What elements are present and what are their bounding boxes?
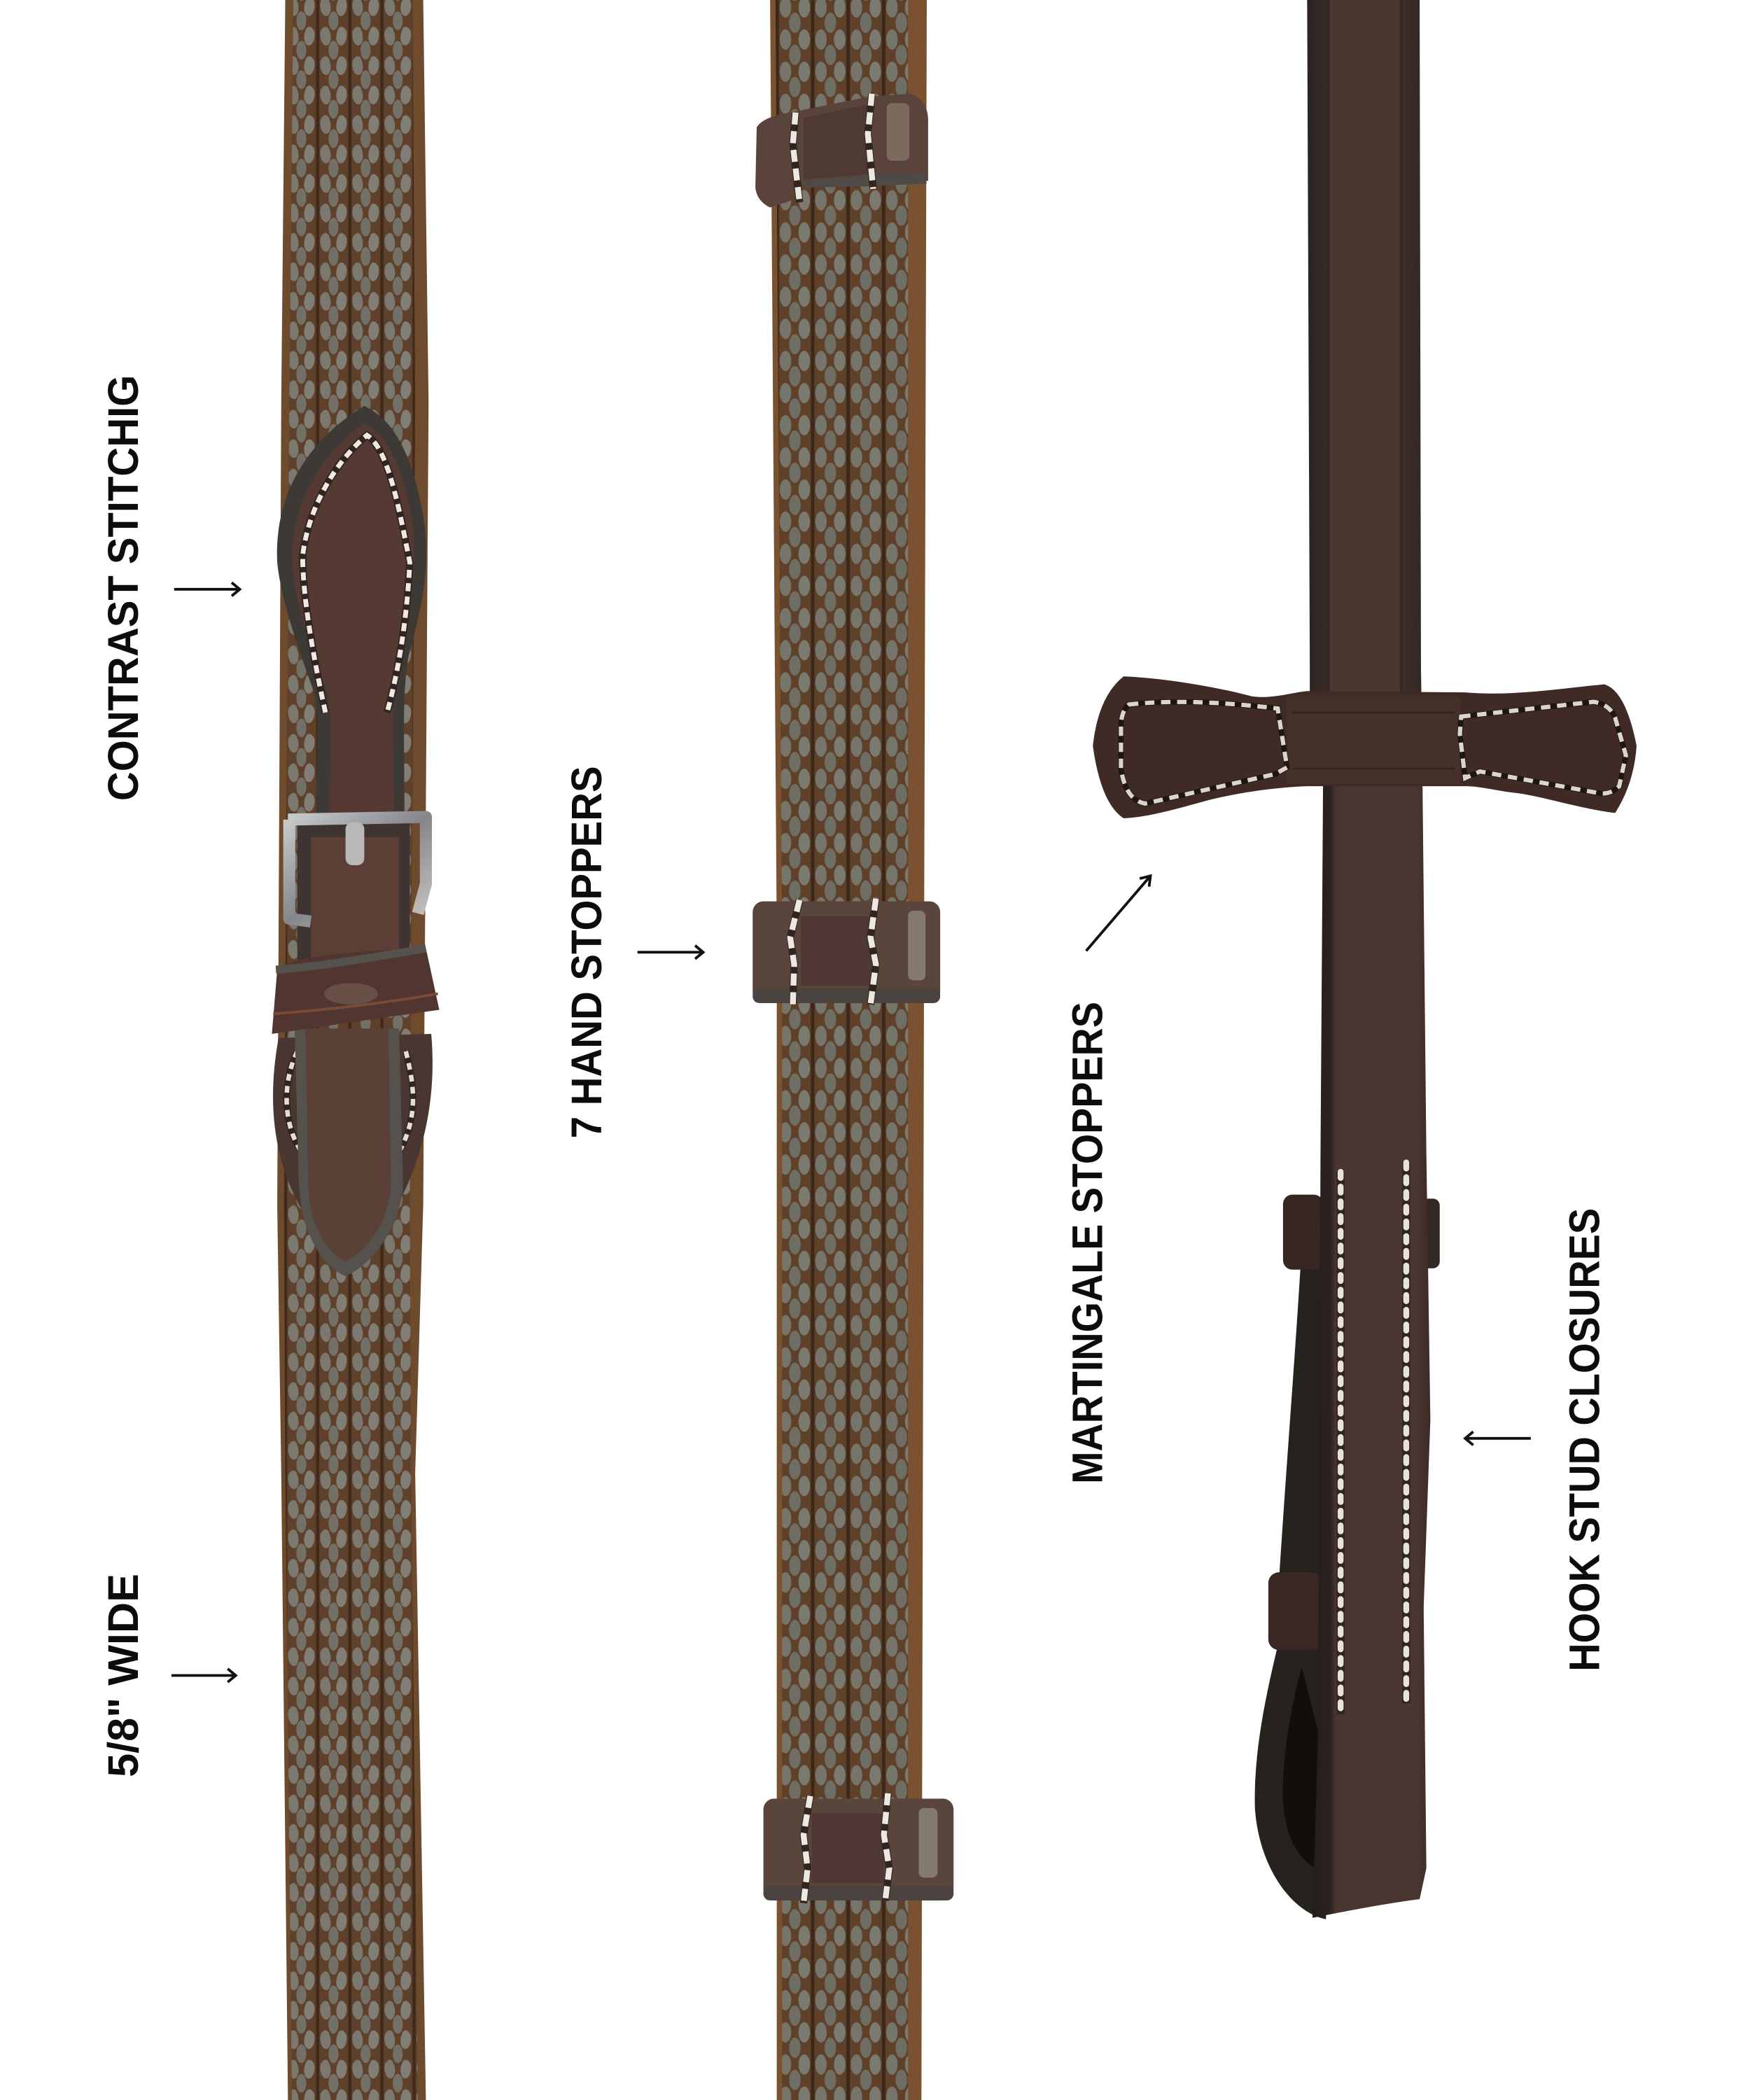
label: hand stoppers: 7 HAND STOPPERS [563, 766, 610, 1138]
hand stopper top [755, 94, 928, 208]
arrow: martingale stoppers [1086, 876, 1150, 951]
label: martingale stoppers: MARTINGALE STOPPERS [1064, 1002, 1112, 1484]
martingale stopper [1093, 676, 1637, 818]
lower keeper wings [273, 1034, 433, 1239]
panel: rein with buckle [272, 0, 440, 2100]
lower leather tab [295, 1028, 403, 1276]
leather keeper band [272, 948, 440, 1034]
upper leather keeper [277, 406, 426, 817]
arrow: hand stoppers [638, 946, 703, 959]
leather loop [1255, 1245, 1339, 1919]
strap lower section [1312, 764, 1430, 1918]
strap stitching [1340, 1163, 1406, 1714]
panel: leather rein with martingale stopper [1093, 0, 1637, 1919]
arrow: hook stud closures [1465, 1432, 1531, 1445]
contrast stitching [302, 435, 410, 713]
middle strap [298, 817, 410, 971]
hand stopper bottom [764, 1793, 953, 1903]
arrow: width [172, 1669, 236, 1682]
label: contrast stitching: CONTRAST STITCHIG [99, 375, 147, 801]
webbing: rein two [770, 0, 927, 2100]
webbing: rein one [277, 0, 428, 2100]
hand stopper middle [752, 899, 940, 1004]
small keepers [1268, 1195, 1440, 1650]
panel: rein with hand stoppers [752, 0, 953, 2100]
leather strap [1307, 0, 1422, 750]
silver buckle [288, 817, 426, 921]
arrow: contrast stitching [174, 582, 239, 596]
label: hook stud closures: HOOK STUD CLOSURES [1560, 1208, 1608, 1672]
label: width: 5/8" WIDE [99, 1574, 147, 1777]
